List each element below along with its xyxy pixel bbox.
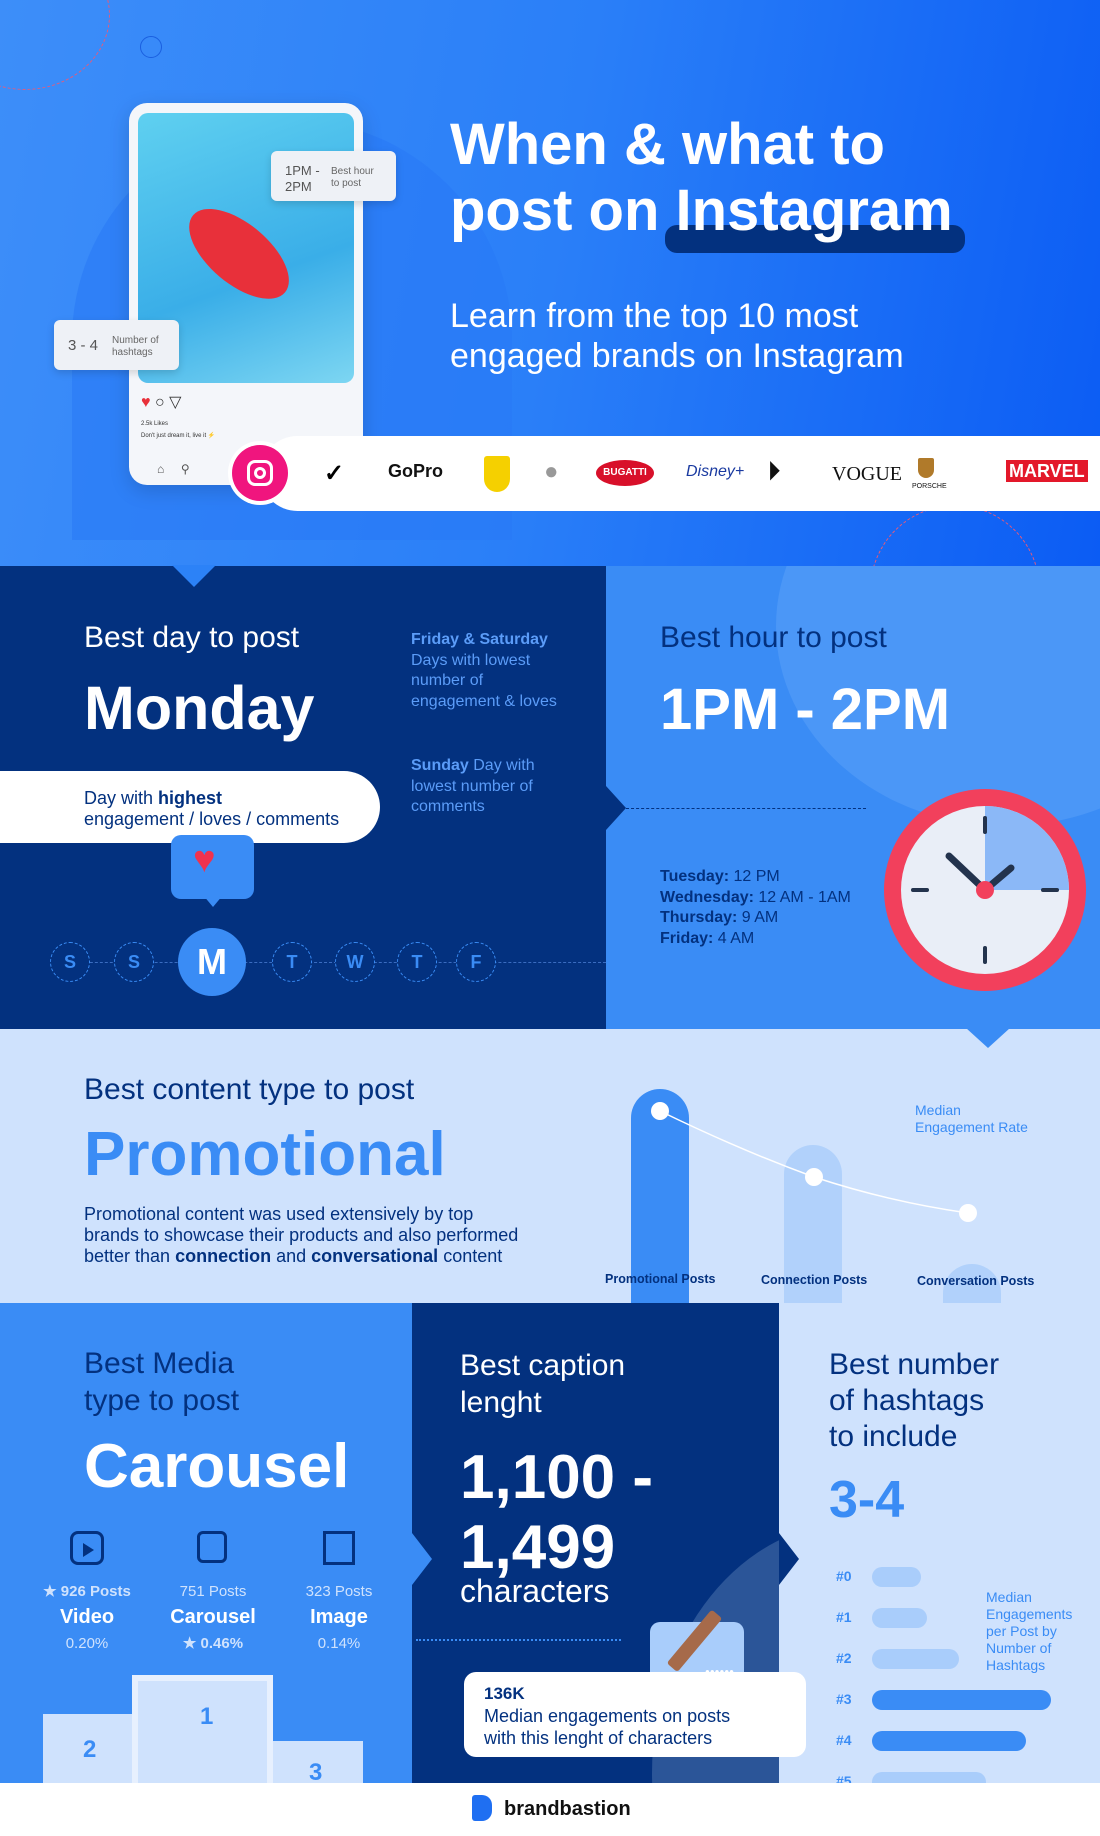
side notes: engagement & loves bbox=[411, 692, 557, 710]
icon: pencil bubble bbox=[650, 1622, 744, 1687]
text: Best number bbox=[829, 1348, 999, 1381]
weekday row: T bbox=[286, 952, 298, 972]
panel: media type: type to post bbox=[84, 1384, 239, 1417]
icon: heart bubble bbox=[171, 835, 254, 899]
text: of hashtags bbox=[829, 1384, 984, 1417]
time list: Friday: 4 AM bbox=[660, 930, 754, 947]
weekday row bbox=[50, 928, 606, 996]
panel: media type: 1 bbox=[200, 1703, 213, 1730]
time list: Tuesday: 12 PM bbox=[660, 868, 780, 885]
side notes: Friday & Saturday bbox=[411, 631, 548, 648]
value: 3-4: 3-4 bbox=[829, 1471, 904, 1529]
side notes: number of bbox=[411, 672, 483, 689]
phone action icons: ♥ ○ ▽ bbox=[141, 394, 181, 411]
subtitle: Learn from the top 10 most bbox=[450, 297, 858, 335]
panel: caption length: 1,100 - bbox=[460, 1443, 653, 1512]
panel: content type bbox=[0, 1029, 1100, 1303]
podium bbox=[43, 1714, 133, 1794]
phone mockup: ⌂ ⚲ bbox=[157, 462, 190, 476]
subtitle bbox=[450, 297, 904, 375]
panel: media type: Video bbox=[60, 1606, 114, 1628]
footer logo bbox=[472, 1795, 631, 1821]
weekday row: W bbox=[346, 952, 364, 972]
panel: caption length bbox=[412, 1303, 779, 1783]
panel: caption length: 1,499 bbox=[460, 1513, 615, 1582]
bar chart: hashtags: per Post by bbox=[986, 1623, 1057, 1639]
callout card: median engagements bbox=[464, 1672, 806, 1757]
icon: pencil bubble: ●●●●●● bbox=[705, 1667, 734, 1676]
chart: engagement rate: Connection Posts bbox=[761, 1273, 867, 1287]
bar chart: hashtags: Engagements bbox=[986, 1606, 1072, 1622]
callout: hashtags: Number of bbox=[112, 335, 159, 346]
phone image bbox=[138, 113, 354, 383]
callout card: median engagements: 136K bbox=[484, 1684, 525, 1703]
callout card: median engagements: Median engagements on posts bbox=[484, 1706, 730, 1726]
highlight pill bbox=[0, 771, 380, 843]
chart: engagement rate: Median bbox=[915, 1102, 961, 1118]
callout: hashtags: hashtags bbox=[112, 347, 153, 358]
panel: caption length: characters bbox=[460, 1573, 609, 1609]
chart: engagement rate: Conversation Posts bbox=[917, 1274, 1034, 1288]
panel: best day: lowest number of bbox=[411, 778, 533, 794]
icon: heart bubble: ♥ bbox=[193, 839, 216, 881]
description: brands to showcase their products and also performed bbox=[84, 1225, 518, 1245]
bar chart: hashtags: Median bbox=[986, 1589, 1032, 1605]
phone mockup: 2.5k Likes bbox=[141, 421, 168, 427]
title: When & what to bbox=[450, 112, 885, 177]
callout: best hour bbox=[271, 151, 396, 201]
value: Monday bbox=[84, 674, 314, 742]
panel: media type: 323 Posts bbox=[306, 1583, 372, 1600]
brand logos bar: VOGUE bbox=[832, 463, 902, 485]
callout: hashtags bbox=[54, 320, 179, 370]
bar chart: hashtags: Number of bbox=[986, 1640, 1051, 1656]
value: promotional: Promotional bbox=[84, 1120, 446, 1189]
panel: media type: 0.20% bbox=[66, 1635, 108, 1652]
panel: caption length: lenght bbox=[460, 1386, 542, 1419]
heading: Best hour to post bbox=[660, 621, 887, 654]
panel: best hour bbox=[606, 566, 1100, 1029]
title bbox=[450, 112, 965, 253]
panel: media type: ★ 0.46% bbox=[183, 1635, 243, 1652]
highlight pill: engagement / loves / comments bbox=[84, 809, 339, 829]
text: to include bbox=[829, 1420, 957, 1453]
chart: engagement rate: Promotional Posts bbox=[605, 1272, 715, 1286]
subtitle: engaged brands on Instagram bbox=[450, 337, 904, 375]
weekday row: M bbox=[197, 941, 227, 982]
chart: engagement rate: Engagement Rate bbox=[915, 1119, 1028, 1135]
brand logos bar: BUGATTI bbox=[603, 467, 647, 478]
side notes bbox=[411, 631, 557, 710]
callout: best hour: 1PM - bbox=[285, 163, 320, 178]
brand logos bar: PORSCHE bbox=[912, 483, 947, 490]
title: post on Instagram bbox=[450, 178, 953, 243]
media stats: ★ 926 Posts bbox=[43, 1583, 131, 1600]
panel: caption length: Best caption bbox=[460, 1349, 625, 1382]
brand logos bar: ● bbox=[544, 458, 558, 485]
brand logos bar: GoPro bbox=[388, 461, 443, 481]
panel: media type bbox=[0, 1303, 412, 1783]
callout card: median engagements: with this lenght of characters bbox=[484, 1728, 712, 1748]
highlight pill: Day with highest bbox=[84, 788, 222, 808]
description: Promotional content was used extensively by top bbox=[84, 1204, 473, 1224]
text: Best content type to post bbox=[84, 1073, 414, 1106]
bar chart: hashtags: #1 bbox=[836, 1609, 852, 1625]
heading: Best day to post bbox=[84, 621, 299, 654]
description: better than connection and conversational content bbox=[84, 1246, 502, 1266]
callout: best hour: Best hour bbox=[331, 166, 374, 177]
icons: media bbox=[70, 1531, 104, 1565]
callout: best hour: to post bbox=[331, 178, 361, 189]
time list bbox=[660, 868, 851, 947]
panel: best day: Sunday Day with bbox=[411, 757, 535, 774]
icon: instagram bbox=[228, 441, 292, 505]
bar chart: hashtags: #4 bbox=[836, 1732, 852, 1748]
panel: media type: Best Media bbox=[84, 1347, 234, 1380]
bar chart: hashtags: #2 bbox=[836, 1650, 852, 1666]
panel: media type: 751 Posts bbox=[180, 1583, 246, 1600]
description bbox=[84, 1204, 518, 1266]
weekday row: S bbox=[64, 952, 76, 972]
brand logos bar: ✓ bbox=[324, 460, 344, 487]
callout: best hour: 2PM bbox=[285, 179, 312, 194]
icon: clock bbox=[884, 789, 1086, 991]
footer logo: brandbastion bbox=[504, 1798, 631, 1820]
weekday row: F bbox=[470, 952, 482, 972]
brand logos bar: MARVEL bbox=[1009, 461, 1085, 481]
phone mockup: Don't just dream it, live it ⚡ bbox=[141, 433, 215, 439]
panel: best day: comments bbox=[411, 798, 485, 815]
panel: best day bbox=[0, 566, 606, 1029]
phone mockup bbox=[129, 103, 363, 485]
time list: Thursday: 9 AM bbox=[660, 909, 778, 926]
panel: media type: Carousel bbox=[170, 1606, 256, 1628]
panel: media type: Image bbox=[310, 1606, 368, 1628]
panel: media type: 0.14% bbox=[318, 1635, 360, 1652]
time list: Wednesday: 12 AM - 1AM bbox=[660, 889, 851, 906]
bar chart: hashtags bbox=[836, 1567, 1072, 1783]
brand logos bar: ⏵ bbox=[768, 458, 780, 485]
brand logos bar bbox=[260, 436, 1100, 511]
value: 1PM - 2PM bbox=[660, 677, 950, 742]
callout: hashtags: 3 - 4 bbox=[68, 337, 98, 354]
podium: 2 bbox=[83, 1736, 96, 1763]
side notes: Days with lowest bbox=[411, 652, 530, 668]
panel: media type: Carousel bbox=[84, 1432, 349, 1501]
chart: engagement rate bbox=[605, 1089, 1034, 1303]
panel: hashtags bbox=[779, 1303, 1100, 1783]
header background bbox=[0, 0, 1100, 566]
bar chart: hashtags: #0 bbox=[836, 1568, 852, 1584]
bar chart: hashtags: Hashtags bbox=[986, 1657, 1045, 1673]
bar chart: hashtags: #3 bbox=[836, 1691, 852, 1707]
brand logos bar: Disney+ bbox=[686, 463, 744, 480]
weekday row: S bbox=[128, 952, 140, 972]
weekday row: T bbox=[412, 952, 422, 972]
